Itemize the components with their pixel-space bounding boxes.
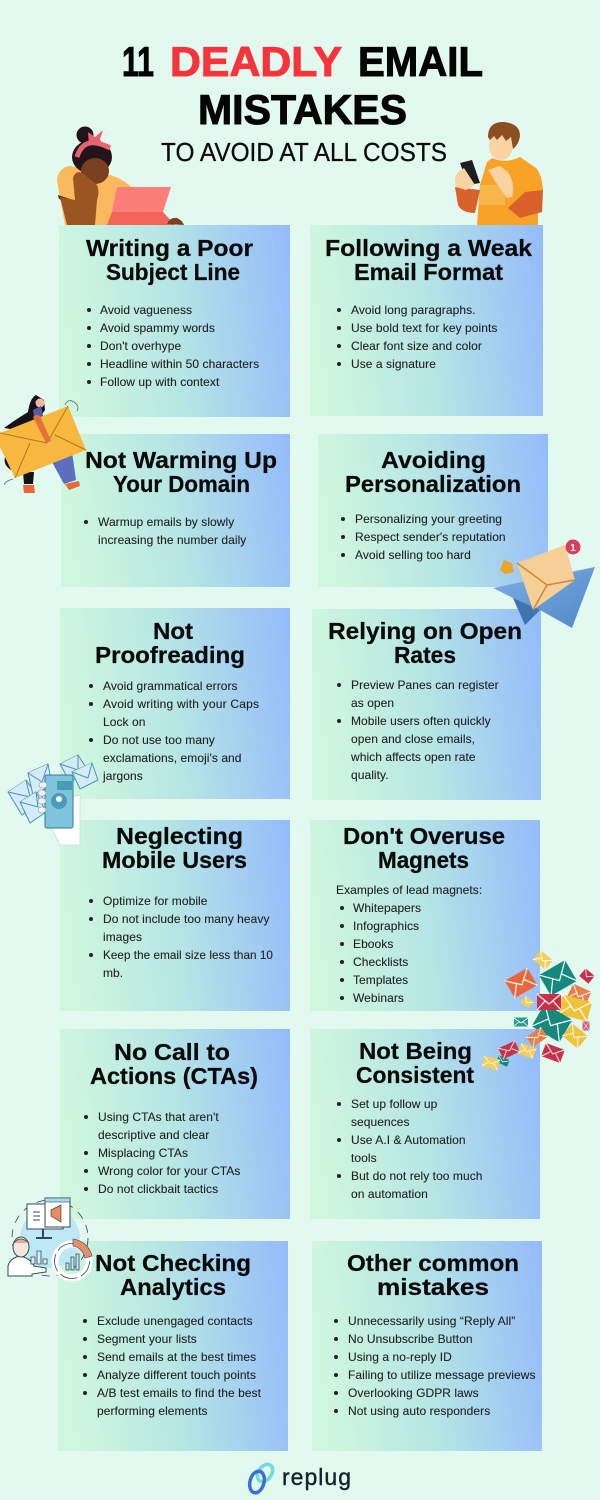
panel: not checking analytics: Analytics [120,1274,226,1300]
panel: other common mistakes: No Unsubscribe Button [348,1332,473,1346]
illustration: man with phone [455,122,543,225]
panel: relying on open rates: Relying on Open [328,618,522,644]
panel: not being consistent: sequences [351,1115,410,1129]
panel: neglecting mobile users: images [103,930,142,944]
panel: other common mistakes: Overlooking GDPR laws [348,1386,479,1400]
panel: relying on open rates: quality. [351,768,389,782]
panel: not proofreading: Not [153,618,193,644]
panel: writing a poor subject line: Subject Line [106,259,240,285]
panel: not warming up your domain: Warmup emails by slowly [98,515,234,529]
panel: not warming up your domain: Your Domain [113,471,250,497]
panel: not checking analytics: Exclude unengaged contacts [97,1314,253,1328]
panel: neglecting mobile users: mb. [103,966,123,980]
panel: other common mistakes: mistakes [377,1274,489,1300]
panel: not checking analytics [58,1241,288,1451]
panel: no call to actions: Do not clickbait tactics [98,1182,218,1196]
panel: not checking analytics: performing elements [97,1404,208,1418]
panel: not checking analytics: Analyze different touch points [97,1368,256,1382]
panel: not checking analytics: A/B test emails to find the best [97,1386,262,1400]
panel: not being consistent: tools [351,1151,377,1165]
panel: relying on open rates: Preview Panes can register [351,678,499,692]
panel: no call to actions [60,1029,290,1219]
panel: writing a poor subject line: Don't overhype [100,339,181,353]
panel: writing a poor subject line: Follow up with context [100,375,220,389]
panel: no call to actions: Misplacing CTAs [98,1146,188,1160]
panel: no call to actions: Wrong color for your CTAs [98,1164,240,1178]
panel: following a weak email format: Avoid long paragraphs. [351,303,476,317]
panel: following a weak email format: Use a signature [351,357,436,371]
panel: writing a poor subject line: Avoid vagueness [100,303,192,317]
panel: don't overuse magnets: Webinars [353,991,404,1005]
panel: not proofreading: Avoid writing with your Caps [103,697,259,711]
panel: not proofreading [60,608,290,799]
panel: don't overuse magnets [310,820,540,1011]
panel: not being consistent: Not Being [359,1038,472,1064]
panel: don't overuse magnets: Don't Overuse [343,823,505,849]
panel: neglecting mobile users: Neglecting [116,823,243,849]
panel: other common mistakes: Other common [347,1250,519,1276]
panel: avoiding personalization: Respect sender's reputation [355,530,506,544]
panel: relying on open rates: open and close emails, [351,732,475,746]
panel: not being consistent: on automation [351,1187,428,1201]
illustration: analytics dashboard and person [8,1198,92,1278]
panel: writing a poor subject line: Writing a Poor [86,235,253,261]
panel: don't overuse magnets: Ebooks [353,937,393,951]
panel: neglecting mobile users: Do not include too many heavy [103,912,270,926]
panel: relying on open rates [312,609,541,800]
panel: avoiding personalization: Personalizing your greeting [355,512,502,526]
panel: neglecting mobile users: Mobile Users [102,847,247,873]
panel: avoiding personalization: Avoid selling too hard [355,548,471,562]
panel: not warming up your domain: Not Warming Up [85,447,277,473]
panel: not checking analytics: Not Checking [95,1250,251,1276]
panel: relying on open rates: which affects open rate [350,750,476,764]
panel: neglecting mobile users: Optimize for mobile [103,894,208,908]
panel: not proofreading: jargons [102,769,143,783]
panel: not proofreading: Proofreading [95,642,245,668]
panel: not being consistent [310,1029,540,1219]
panel: not proofreading: Do not use too many [103,733,215,747]
panel: not warming up your domain: increasing the number daily [98,533,246,547]
subtitle: TO AVOID AT ALL COSTS [161,137,447,167]
panel: not checking analytics: Send emails at the best times [97,1350,256,1364]
panel: not being consistent: But do not rely too much [351,1169,483,1183]
panel: not warming up your domain [61,434,290,587]
title: EMAIL [358,38,483,85]
illustration: paper plane with envelope [493,540,595,628]
panel: writing a poor subject line [59,225,290,417]
logo: replug: replug [282,1464,351,1490]
illustration: paper plane with envelope: 1 [570,543,576,554]
panel: following a weak email format: Email Format [354,259,503,285]
title: DEADLY [170,38,342,85]
logo: replug [247,1461,351,1494]
panel: following a weak email format: Use bold text for key points [351,321,497,335]
panel: don't overuse magnets: Magnets [378,847,469,873]
title: MISTAKES [198,86,407,133]
panel: not checking analytics: Segment your lists [97,1332,197,1346]
panel: relying on open rates: as open [351,696,394,710]
panel: writing a poor subject line: Headline within 50 characters [100,357,259,371]
illustration: phone with flying emails [8,755,98,845]
panel: don't overuse magnets: Whitepapers [353,901,421,915]
panel: don't overuse magnets: Infographics [353,919,419,933]
panel: not being consistent: Use A.I & Automation [351,1133,466,1147]
title: 11 [122,38,154,85]
panel: no call to actions: No Call to [114,1039,230,1065]
panel: relying on open rates: Rates [394,642,456,668]
panel: not being consistent: Set up follow up [351,1097,438,1111]
panel: other common mistakes: Unnecessarily using “Reply All” [348,1314,515,1328]
panel: following a weak email format: Clear font size and color [351,339,482,353]
panel: other common mistakes: Not using auto responders [348,1404,490,1418]
panel: not proofreading: Avoid grammatical errors [103,679,238,693]
illustration: scattered colourful envelopes [482,950,595,1070]
panel: following a weak email format [310,225,543,416]
panel: avoiding personalization [318,434,548,587]
panel: other common mistakes: Using a no-reply ID [348,1350,452,1364]
panel: avoiding personalization: Personalization [345,471,521,497]
panel: other common mistakes [312,1241,542,1451]
panel: not being consistent: Consistent [356,1062,474,1088]
panel: not proofreading: exclamations, emoji's and [103,751,242,765]
panel: don't overuse magnets: Checklists [353,955,408,969]
panel: relying on open rates: Mobile users often quickly [351,714,491,728]
panel: other common mistakes: Failing to utilize message previews [348,1368,536,1382]
panel: no call to actions: Using CTAs that aren't [98,1110,219,1124]
panel: don't overuse magnets: Examples of lead magnets: [336,883,482,897]
panel: no call to actions: descriptive and clear [98,1128,209,1142]
illustration: woman with tablet [57,126,184,225]
panel: not proofreading: Lock on [103,715,145,729]
panel: writing a poor subject line: Avoid spammy words [100,321,215,335]
panel: don't overuse magnets: Templates [353,973,408,987]
illustration: woman carrying envelope [0,395,86,493]
panel: no call to actions: Actions (CTAs) [90,1063,258,1089]
panel: neglecting mobile users [60,820,290,1011]
panel: avoiding personalization: Avoiding [381,447,486,473]
title [122,38,483,133]
panel: neglecting mobile users: Keep the email size less than 10 [103,948,273,962]
panel: following a weak email format: Following a Weak [325,235,532,261]
